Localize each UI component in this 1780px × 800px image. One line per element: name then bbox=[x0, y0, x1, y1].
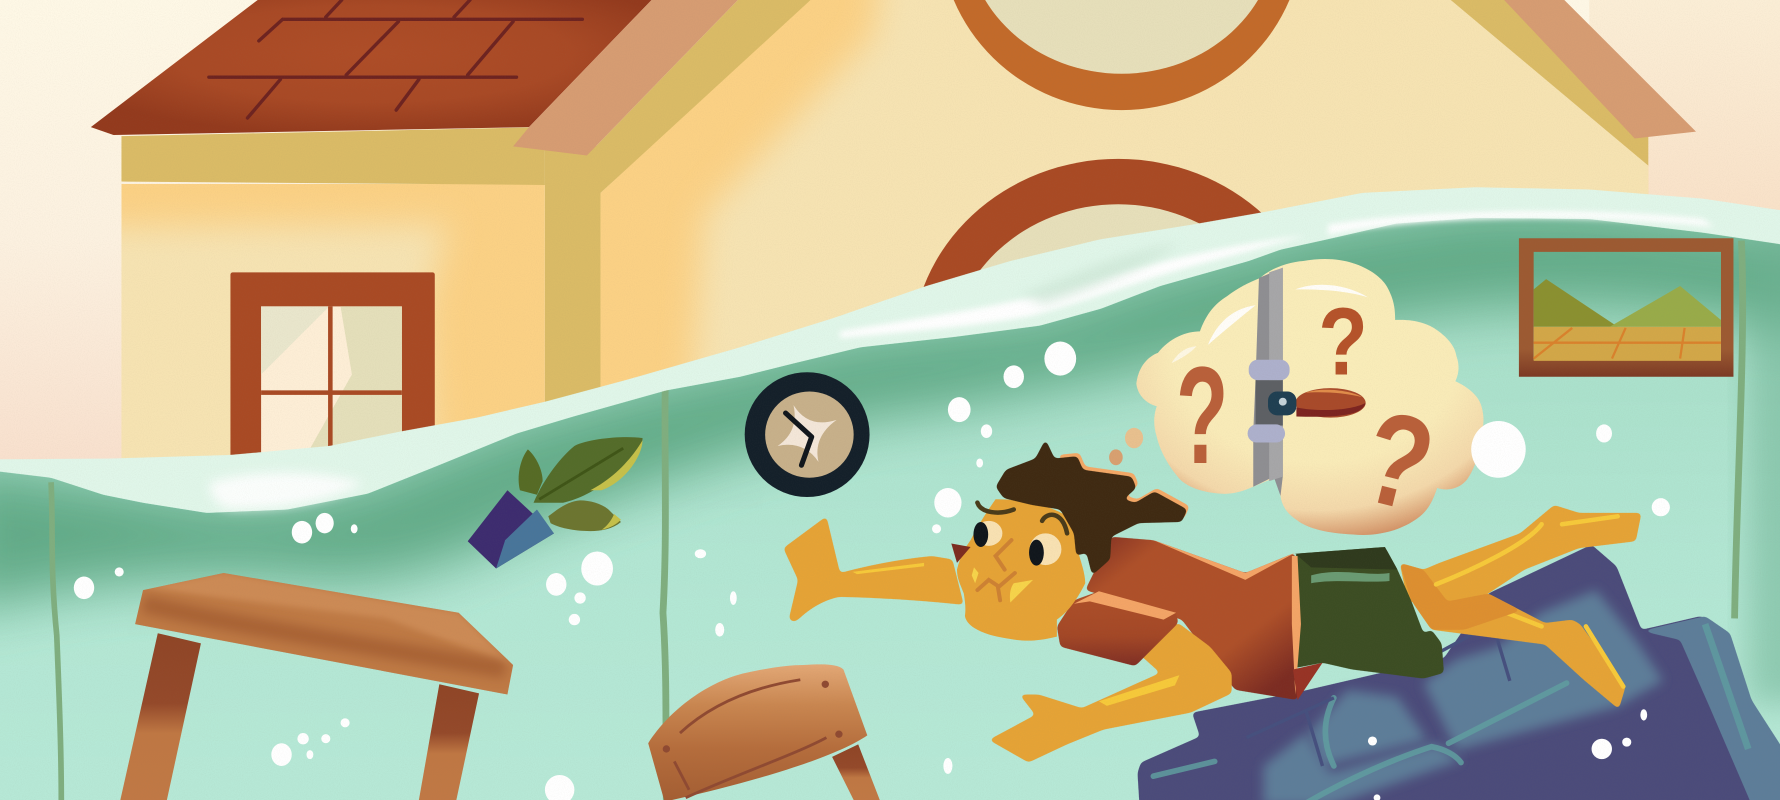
question marks: ? bbox=[1318, 288, 1368, 395]
hair bbox=[996, 439, 1187, 575]
leaves bbox=[519, 437, 643, 531]
table bbox=[120, 573, 513, 800]
pipe bbox=[1248, 268, 1290, 496]
round window top bbox=[940, 0, 1303, 110]
shirt bbox=[1085, 537, 1298, 700]
question marks: ? bbox=[1176, 339, 1228, 493]
right gable yellow band bbox=[1451, 0, 1648, 166]
sofa bbox=[1137, 545, 1780, 800]
corner pillar bbox=[545, 127, 601, 477]
small thought dots bbox=[1125, 428, 1143, 448]
hair highlight rim bbox=[1048, 436, 1190, 520]
front leg bbox=[1400, 505, 1642, 608]
shirt trim bbox=[1153, 540, 1301, 694]
face details bbox=[972, 503, 1067, 603]
chair leg bbox=[832, 744, 880, 800]
left window bbox=[230, 272, 435, 471]
chair bbox=[648, 664, 880, 800]
left wing wall bbox=[122, 184, 545, 458]
left gable fascia bbox=[513, 0, 738, 155]
right gable fascia bbox=[1504, 0, 1696, 138]
cloud highlights bbox=[1208, 285, 1368, 345]
table top bbox=[135, 573, 513, 694]
cloud bbox=[1136, 259, 1483, 535]
picture frame bbox=[1519, 238, 1733, 377]
left roof bbox=[91, 0, 652, 135]
chair details bbox=[664, 680, 841, 798]
shorts bbox=[1293, 547, 1444, 679]
question marks bbox=[1176, 288, 1447, 541]
table legs bbox=[120, 633, 201, 800]
arm float bbox=[1057, 591, 1178, 666]
air bubbles bbox=[74, 342, 1670, 800]
nose lip bbox=[951, 544, 971, 563]
person swimming bbox=[783, 436, 1642, 763]
question marks: ? bbox=[1349, 383, 1447, 541]
house bbox=[90, 0, 1696, 458]
thought bubble bbox=[1109, 259, 1483, 541]
flood water body bbox=[0, 207, 1780, 800]
left gable yellow band bbox=[545, 0, 811, 193]
potted plant bbox=[468, 437, 643, 569]
head bbox=[957, 499, 1085, 641]
water plant strands bbox=[51, 241, 1743, 800]
forward arm bbox=[783, 516, 964, 622]
arched window bbox=[912, 159, 1325, 545]
back leg bbox=[1411, 593, 1626, 709]
lower arm bbox=[989, 623, 1232, 763]
wall clock bbox=[745, 372, 870, 497]
water foam surface bbox=[0, 187, 1780, 513]
valve handle bbox=[1268, 388, 1366, 418]
chair seat bbox=[648, 664, 867, 800]
wall shadow band bbox=[121, 127, 545, 185]
main facade bbox=[600, 0, 1648, 387]
pot bbox=[468, 490, 554, 569]
